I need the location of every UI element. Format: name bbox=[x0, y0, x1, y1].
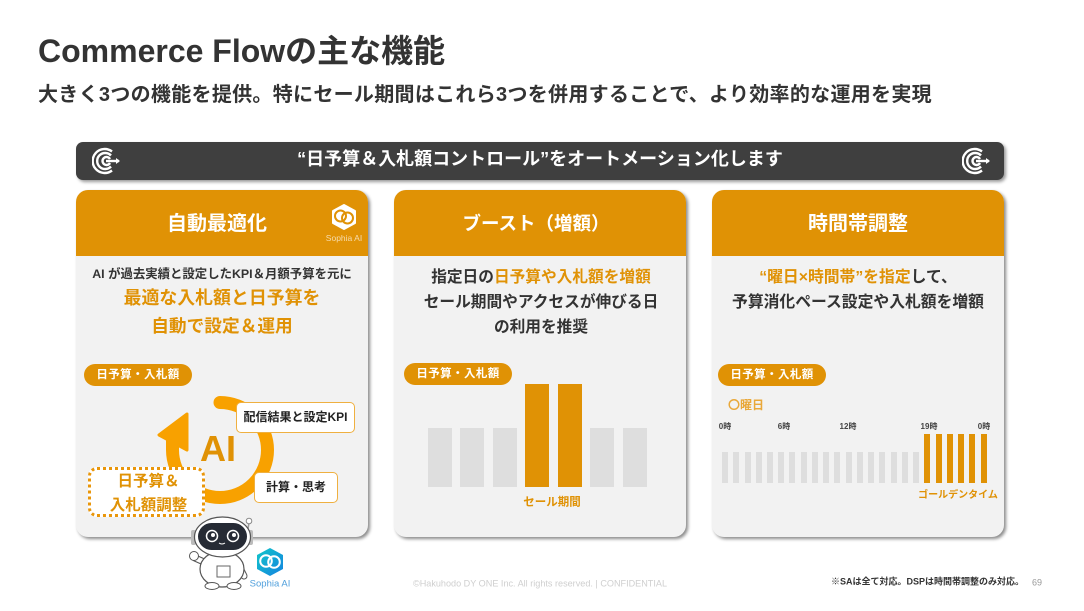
description text: “曜日×時間帯”を指定して、 bbox=[759, 269, 957, 286]
bar chart: sale period bbox=[428, 384, 647, 508]
description text bbox=[732, 268, 984, 311]
panel heading: ブースト（増額） bbox=[462, 212, 610, 233]
description text: セール期間やアクセスが伸びる日 bbox=[424, 294, 658, 311]
title: Commerce Flowの主な機能 bbox=[38, 33, 445, 69]
panel heading: 時間帯調整 bbox=[808, 213, 908, 235]
icon: commerce flow logo right bbox=[962, 148, 990, 174]
pill label: 日予算・入札額 bbox=[96, 369, 180, 381]
bar chart: hours: 0時 bbox=[719, 422, 731, 431]
callout: 計算・思考 bbox=[254, 472, 338, 503]
AI label: AI bbox=[200, 428, 236, 469]
description text: の利用を推奨 bbox=[494, 319, 588, 336]
bar chart: hours bbox=[719, 422, 998, 501]
footnote: ※SAは全て対応。DSPは時間帯調整のみ対応。 bbox=[831, 576, 1024, 586]
highlighted text: 最適な入札額と日予算を bbox=[124, 288, 320, 308]
pill label: 日予算・入札額 bbox=[416, 368, 500, 380]
highlighted text second line: 自動で設定＆運用 bbox=[151, 316, 293, 336]
description text: 予算消化ペース設定や入札額を増額 bbox=[732, 294, 984, 311]
banner bbox=[76, 142, 1004, 180]
pill label: 日予算・入札額 bbox=[730, 369, 814, 381]
page number: 69 bbox=[1032, 578, 1042, 588]
description line: AI が過去実績と設定したKPI＆月額予算を元に bbox=[92, 267, 352, 281]
callout: 配信結果と設定KPI bbox=[236, 402, 355, 433]
panel: ブースト bbox=[394, 190, 686, 537]
weekday label: 〇曜日 bbox=[728, 398, 764, 412]
copyright: ©Hakuhodo DY ONE Inc. All rights reserved. | CONFIDENTIAL bbox=[413, 578, 667, 588]
callout: 日予算＆入札額調整: 入札額調整 bbox=[110, 497, 187, 514]
pill label bbox=[404, 363, 512, 385]
panel heading: 自動最適化 bbox=[167, 213, 267, 235]
bar chart: hours: 0時 bbox=[978, 422, 990, 431]
logo caption: Sophia AI bbox=[326, 233, 362, 243]
bar chart: hours: 12時 bbox=[840, 422, 856, 431]
bar chart: hours: 19時 bbox=[921, 422, 937, 431]
panel header bbox=[76, 190, 368, 256]
panel header bbox=[394, 190, 686, 256]
logo caption: Sophia AI bbox=[250, 578, 290, 589]
panel header bbox=[712, 190, 1004, 256]
subtitle: 大きく3つの機能を提供。特にセール期間はこれら3つを併用することで、より効率的な運用を実現 bbox=[38, 84, 932, 106]
panel: 時間帯調整 bbox=[712, 190, 1004, 537]
icon: commerce flow logo left bbox=[92, 148, 120, 174]
description text bbox=[424, 268, 658, 336]
diagram: AI cycle bbox=[88, 396, 355, 517]
banner text: “日予算＆入札額コントロール”をオートメーション化します bbox=[297, 149, 783, 169]
chart caption: セール期間 bbox=[523, 496, 581, 508]
pill label bbox=[84, 364, 192, 386]
callout: 計算・思考: 計算・思考 bbox=[266, 480, 326, 494]
icon: Sophia AI colored logo bbox=[257, 548, 283, 576]
icon: Sophia AI white logo bbox=[332, 204, 356, 230]
callout: 配信結果と設定KPI: 配信結果と設定KPI bbox=[243, 410, 348, 424]
callout: 日予算＆入札額調整: 日予算＆ bbox=[117, 473, 180, 490]
bar chart: hours: 6時 bbox=[778, 422, 790, 431]
description text: 指定日の日予算や入札額を増額 bbox=[431, 269, 651, 286]
pill label bbox=[718, 364, 826, 386]
icon: robot mascot bbox=[189, 516, 253, 590]
chart caption: ゴールデンタイム bbox=[918, 490, 998, 501]
callout: 日予算＆入札額調整 bbox=[88, 467, 205, 517]
cycle arrow bbox=[157, 396, 274, 504]
panel: 自動最適化 bbox=[76, 190, 368, 537]
